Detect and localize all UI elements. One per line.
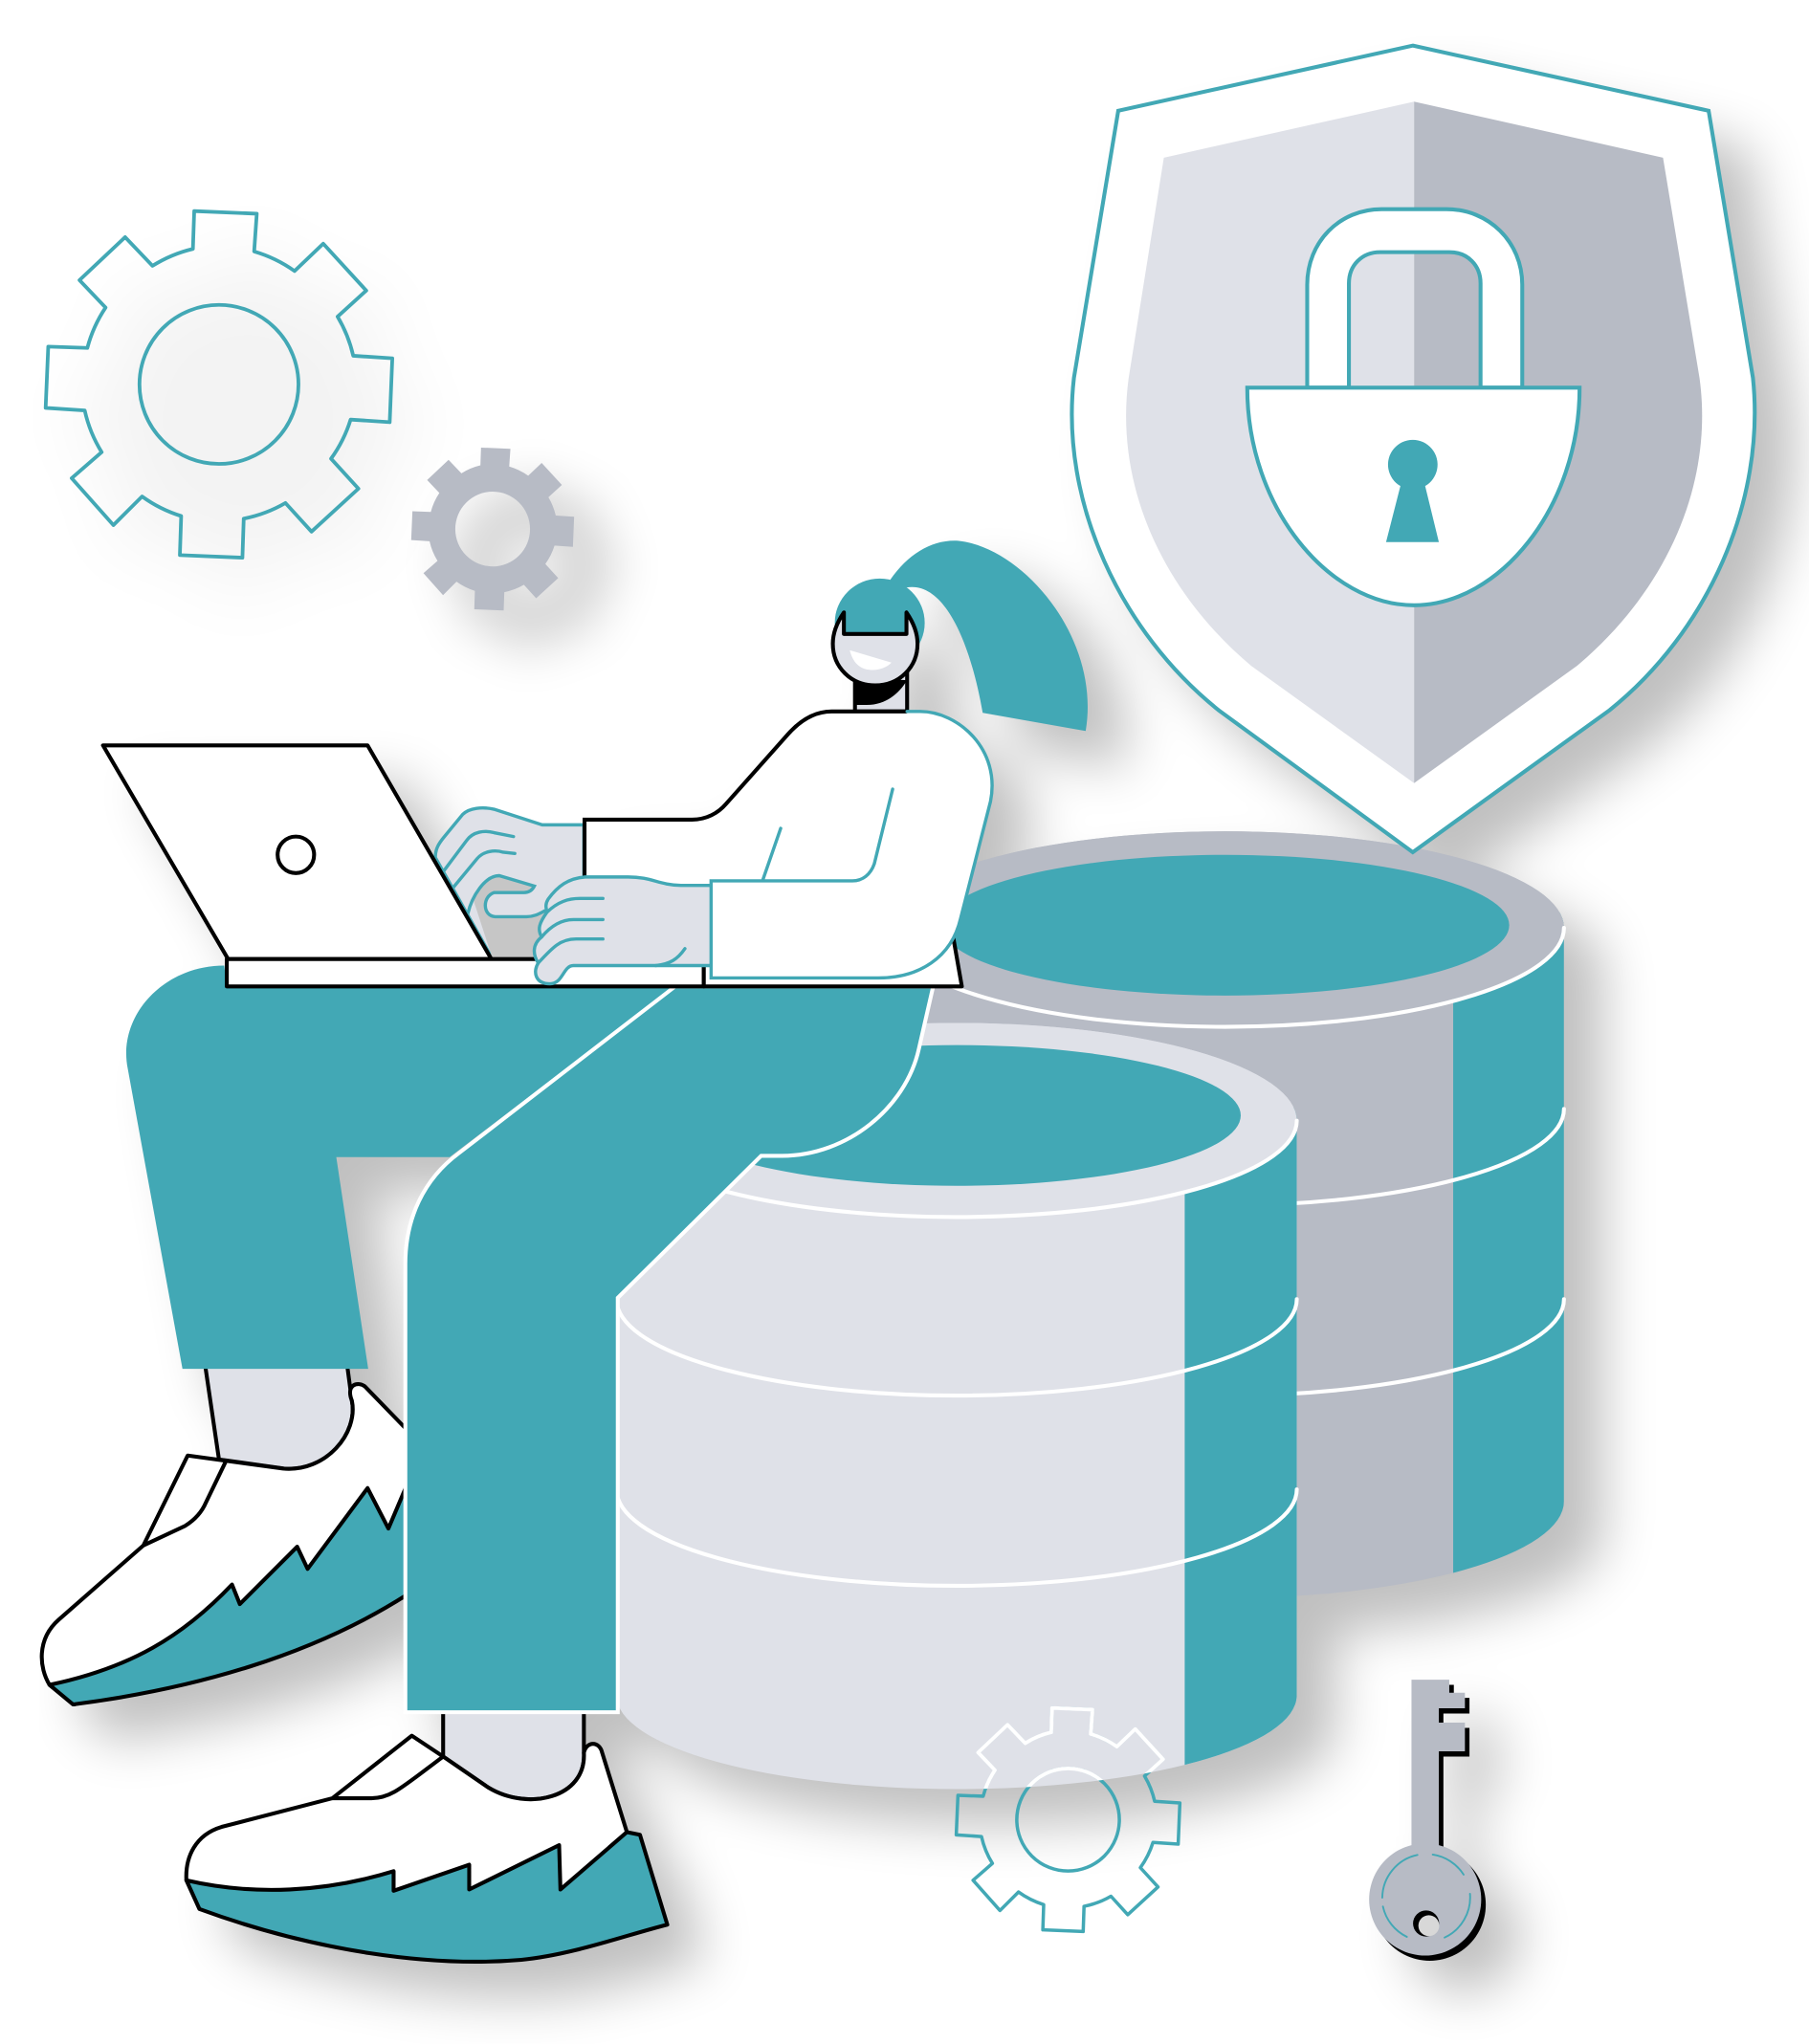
- laptop screen: [103, 745, 492, 959]
- front hand knuckles: [539, 898, 685, 966]
- front shoe tongue line: [332, 1756, 443, 1798]
- ponytail: [891, 540, 1088, 731]
- hair cap: [835, 579, 925, 668]
- front leg: [406, 986, 933, 1712]
- back leg sock: [205, 1362, 353, 1469]
- back shoe tongue line: [143, 1462, 226, 1546]
- gear: small grey: [411, 448, 574, 610]
- back shoe: [42, 1384, 407, 1704]
- gear: large outline: [46, 211, 392, 558]
- soft shadow of large gear: [46, 211, 392, 558]
- database cylinder: front: [616, 1022, 1302, 1812]
- front hand: [534, 877, 711, 984]
- gear: outline over cylinder: [957, 1708, 1180, 1931]
- front shoe upper: [187, 1736, 627, 1916]
- front hand outline: [534, 877, 711, 984]
- shield with padlock: [1071, 46, 1754, 852]
- key: [1369, 1680, 1486, 1961]
- key dashed ring: [1382, 1855, 1470, 1938]
- laptop webcam: [277, 837, 314, 873]
- seat edge: [704, 934, 961, 986]
- sweater: [584, 712, 992, 978]
- back hand: [435, 808, 584, 959]
- key shadow copy: [1374, 1685, 1486, 1961]
- back shoe sole: [50, 1485, 407, 1704]
- back hand fingers: [443, 831, 544, 916]
- neck shadow: [855, 677, 907, 705]
- face: [833, 612, 917, 686]
- smile: [849, 650, 892, 670]
- front shoe: [187, 1736, 668, 1962]
- front shoe sole: [187, 1832, 668, 1962]
- padlock body: [1247, 387, 1579, 605]
- back hand shadow: [474, 876, 544, 959]
- key body: [1369, 1680, 1481, 1955]
- back thigh: [126, 966, 673, 1369]
- database cylinder: back: [886, 831, 1571, 1615]
- sweater teal outline: [711, 712, 992, 978]
- front leg sock: [443, 1704, 584, 1799]
- key hole: [1413, 1910, 1439, 1937]
- laptop base: [227, 959, 704, 986]
- back shoe upper: [42, 1384, 407, 1704]
- sweater body: [584, 712, 992, 978]
- back hand palm: [435, 808, 584, 959]
- padlock shackle: [1307, 209, 1522, 387]
- shield outer: [1071, 46, 1754, 852]
- keyhole: [1386, 440, 1439, 542]
- neck: [855, 665, 907, 712]
- shield right half: [1414, 101, 1702, 783]
- shield left half: [1126, 101, 1414, 783]
- sweater black outline: [585, 712, 907, 878]
- person: [42, 540, 1088, 1962]
